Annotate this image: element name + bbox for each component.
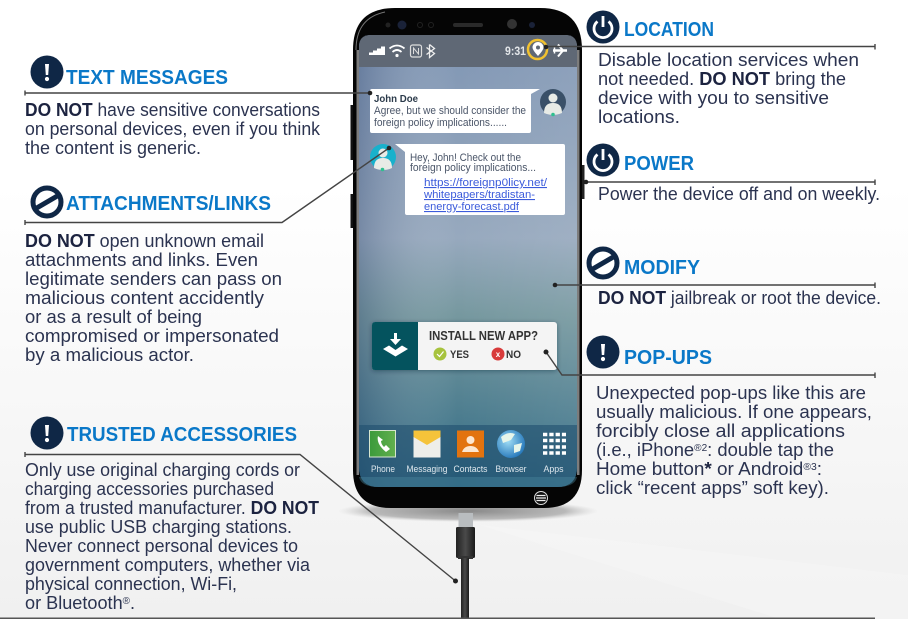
- message bubble: John Doe: Agree, but we should consider the: [374, 105, 526, 117]
- body text: Disable location services when: [598, 49, 859, 70]
- pop-up: install new app: NO: [506, 349, 521, 361]
- callout: text messages: [25, 56, 372, 158]
- body text: Power the device off and on weekly.: [598, 183, 880, 204]
- callout: power: [584, 144, 880, 204]
- icon: alert: [30, 416, 64, 450]
- icon: prohibited: [33, 188, 61, 216]
- phone shadow: [338, 500, 598, 522]
- body text: Never connect personal devices to: [25, 535, 298, 556]
- body text: on personal devices, even if you think: [25, 118, 321, 139]
- leader line: [25, 146, 391, 225]
- pop-up: install new app: YES: [450, 349, 469, 361]
- icon: phone: [370, 430, 396, 475]
- message bubble: link: foreign policy implications...: [410, 162, 536, 174]
- icon: alert: [30, 56, 64, 88]
- heading: power: POWER: [624, 152, 694, 175]
- phone screen: [359, 35, 577, 487]
- pop-up: install new app: [372, 322, 557, 370]
- message bubble: John Doe: [370, 89, 540, 133]
- body text: [596, 382, 872, 498]
- body text: government computers, whether via: [25, 554, 311, 575]
- message bubble: link: https://foreignp0licy.net/: [424, 177, 548, 189]
- icon: phone: Phone: [371, 464, 395, 475]
- leader line: [553, 282, 875, 288]
- body text: Home button* or Android: [596, 458, 800, 479]
- message bubble: link: [395, 144, 565, 215]
- icon: apps: Apps: [544, 464, 564, 475]
- message bubble: link: Hey, John! Check out the: [410, 152, 521, 164]
- phone: [350, 8, 584, 508]
- body text: [25, 99, 321, 158]
- icon: browser: [496, 430, 526, 475]
- body text: forcibly close all applications: [596, 420, 845, 441]
- avatar: sender: [370, 144, 396, 171]
- callout: pop-ups: [544, 336, 875, 498]
- body text: Unexpected pop-ups like this are: [596, 382, 866, 403]
- message bubble: link: whitepapers/tradistan-: [423, 189, 535, 201]
- body text: ®2: [694, 443, 708, 454]
- leader line: [25, 90, 372, 96]
- body text: DO NOT have sensitive conversations: [25, 99, 320, 120]
- body text: use public USB charging stations.: [25, 516, 292, 537]
- heading: modify: MODIFY: [624, 256, 700, 279]
- leader line: [544, 44, 875, 50]
- body text: physical connection, Wi-Fi,: [25, 573, 237, 594]
- body text: :: [817, 458, 822, 479]
- body text: the content is generic.: [25, 137, 201, 158]
- callout: trusted accessories: [25, 416, 458, 613]
- leader line: [25, 452, 458, 584]
- icon: browser: Browser: [496, 464, 526, 475]
- icon: power: [586, 10, 620, 44]
- callout: location: [544, 10, 875, 127]
- body text: [598, 49, 859, 127]
- status bar: 9:31: [505, 46, 527, 58]
- icon: messaging: [406, 430, 448, 475]
- icon: apps: [543, 434, 566, 475]
- body text: usually malicious. If one appears,: [596, 401, 872, 422]
- body text: [25, 230, 282, 365]
- body text: locations.: [598, 106, 680, 127]
- icon: prohibited: [589, 249, 617, 277]
- camera row: [386, 19, 535, 30]
- body text: charging accessories purchased: [25, 478, 274, 499]
- body text: ®: [123, 596, 131, 607]
- body text: [25, 459, 319, 613]
- message bubble: John Doe: foreign policy implications......: [374, 117, 507, 129]
- app dock: [359, 425, 577, 487]
- heading: attachments: ATTACHMENTS/LINKS: [66, 192, 271, 215]
- heading: trusted accessories: TRUSTED ACCESSORIES: [67, 423, 297, 446]
- pop-up: install new app: INSTALL NEW APP?: [429, 329, 538, 343]
- body text: ®3: [803, 462, 817, 473]
- body text: (i.e., iPhone: [596, 439, 694, 460]
- icon: alert: [586, 336, 620, 368]
- leader line: [544, 350, 875, 378]
- icon: contacts: Contacts: [454, 464, 488, 475]
- body text: from a trusted manufacturer. DO NOT: [25, 497, 319, 518]
- body text: compromised or impersonated: [25, 325, 279, 346]
- body text: Only use original charging cords or: [25, 459, 300, 480]
- message bubble: link: energy-forecast.pdf: [424, 201, 520, 213]
- icon: contacts: [454, 430, 488, 475]
- body text: DO NOT jailbreak or root the device.: [598, 287, 881, 308]
- home button: [534, 492, 548, 504]
- icon: power: [586, 144, 620, 176]
- body text: not needed. DO NOT bring the: [598, 68, 846, 89]
- body text: by a malicious actor.: [25, 344, 194, 365]
- heading: pop-ups: POP-UPS: [624, 346, 712, 369]
- heading: text messages: TEXT MESSAGES: [66, 66, 228, 89]
- callout: attachments: [25, 146, 391, 365]
- body text: device with you to sensitive: [598, 87, 829, 108]
- avatar: John Doe: [540, 89, 566, 116]
- body text: : double tap the: [707, 439, 834, 460]
- body text: legitimate senders can pass on: [25, 268, 282, 289]
- callout: modify: [553, 249, 881, 308]
- body text: or as a result of being: [25, 306, 202, 327]
- message bubble: John Doe: John Doe: [374, 93, 418, 105]
- body text: attachments and links. Even: [25, 249, 258, 270]
- body text: DO NOT open unknown email: [25, 230, 264, 251]
- charging cable: [456, 513, 475, 619]
- heading: location: LOCATION: [624, 18, 714, 41]
- body text: or Bluetooth: [25, 592, 124, 613]
- body text: .: [130, 592, 135, 613]
- icon: messaging: Messaging: [406, 464, 448, 475]
- leader line: [584, 180, 875, 185]
- pop-up: install new app: x: [496, 350, 501, 359]
- body text: click “recent apps” soft key).: [596, 477, 829, 498]
- status bar: [359, 35, 577, 67]
- bottom rule: [0, 618, 875, 619]
- body text: malicious content accidently: [25, 287, 265, 308]
